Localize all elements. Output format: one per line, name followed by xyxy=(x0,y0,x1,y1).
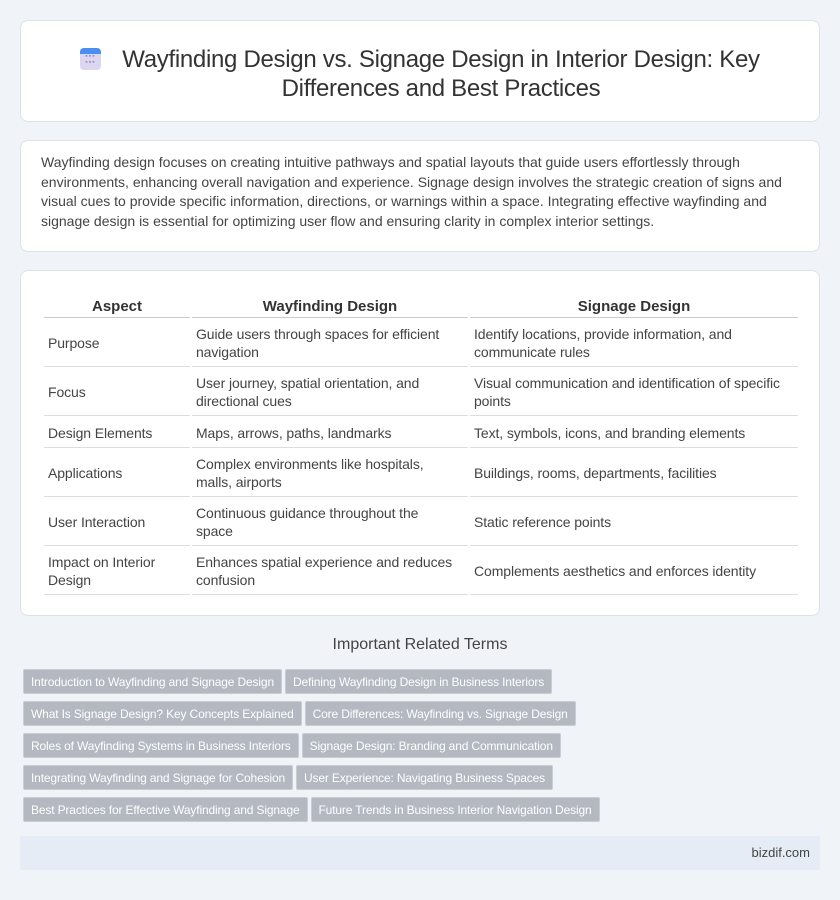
related terms tags: Best Practices for Effective Wayfinding and Signage xyxy=(31,803,300,817)
comparison table: Maps, arrows, paths, landmarks xyxy=(196,424,391,440)
comparison table: Identify locations, provide information, and communicate rules xyxy=(474,326,732,360)
comparison table: Buildings, rooms, departments, facilities xyxy=(474,465,717,481)
related terms tags: Integrating Wayfinding and Signage for Cohesion xyxy=(31,771,285,785)
comparison table: Complements aesthetics and enforces identity xyxy=(474,563,756,579)
comparison table: User Interaction xyxy=(48,514,145,530)
related terms tags: Defining Wayfinding Design in Business Interiors xyxy=(293,675,544,689)
intro text xyxy=(20,140,820,252)
comparison table: Continuous guidance throughout the space xyxy=(196,505,418,539)
icon: calendar xyxy=(80,48,101,70)
comparison table: Enhances spatial experience and reduces confusion xyxy=(196,554,452,588)
comparison table: Text, symbols, icons, and branding elements xyxy=(474,424,745,440)
comparison table: Focus xyxy=(48,384,86,400)
comparison table: Guide users through spaces for efficient navigation xyxy=(196,326,439,360)
comparison table: Impact on Interior Design xyxy=(48,554,155,588)
comparison table: Signage Design xyxy=(578,298,690,315)
icon: calendar: ▪▪▪ xyxy=(85,53,96,60)
footer xyxy=(20,836,820,870)
comparison table: Visual communication and identification of specific points xyxy=(474,375,780,409)
related terms tags xyxy=(23,669,600,822)
comparison table: Static reference points xyxy=(474,514,611,530)
related terms tags: What Is Signage Design? Key Concepts Explained xyxy=(31,707,294,721)
footer: bizdif.com xyxy=(751,845,810,860)
header card xyxy=(20,20,820,122)
comparison table xyxy=(20,270,820,616)
comparison table: Aspect xyxy=(92,298,142,315)
related terms tags: Core Differences: Wayfinding vs. Signage Design xyxy=(313,707,568,721)
comparison table: Wayfinding Design xyxy=(263,298,397,315)
comparison table: Design Elements xyxy=(48,424,152,440)
comparison table: User journey, spatial orientation, and directional cues xyxy=(196,375,419,409)
related terms tags: User Experience: Navigating Business Spaces xyxy=(304,771,545,785)
related terms tags: Future Trends in Business Interior Navigation Design xyxy=(318,803,592,817)
related terms tags: Introduction to Wayfinding and Signage Design xyxy=(31,675,274,689)
comparison table: Purpose xyxy=(48,335,99,351)
icon: calendar: ▪▪▪ xyxy=(85,59,96,66)
title: Wayfinding Design vs. Signage Design in Interior Design: Key Differences and Best Practices xyxy=(122,46,760,102)
comparison table: Applications xyxy=(48,465,122,481)
related terms heading: Important Related Terms xyxy=(333,636,507,653)
related terms tags: Roles of Wayfinding Systems in Business Interiors xyxy=(31,739,291,753)
related terms tags: Signage Design: Branding and Communication xyxy=(310,739,553,753)
comparison table: Complex environments like hospitals, malls, airports xyxy=(196,456,424,490)
intro text: Wayfinding design focuses on creating intuitive pathways and spatial layouts that guide users effortlessly through environments, enhancing overall navigation and experience. Signage design involves the strategic creation of signs and visual cues to provide specific information, directions, or warnings within a space. Integrating effective wayfinding and signage design is essential for optimizing user flow and ensuring clarity in complex interior settings. xyxy=(41,154,782,228)
